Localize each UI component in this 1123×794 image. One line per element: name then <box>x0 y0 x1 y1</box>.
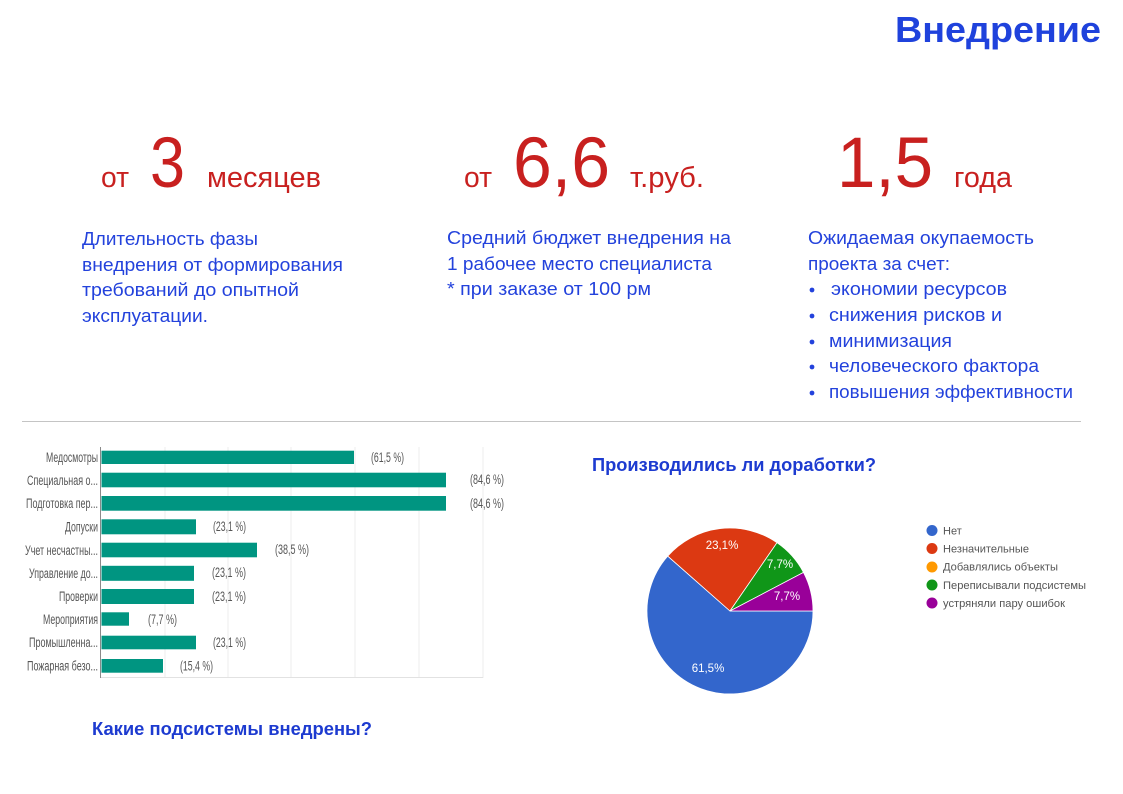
title: Внедрение <box>895 9 1101 50</box>
category labels: Медосмотры <box>46 450 98 465</box>
category labels: Допуски <box>65 520 98 534</box>
value labels: (38,5 %) <box>275 542 309 557</box>
category labels: Специальная о... <box>27 473 98 488</box>
value labels: (7,7 %) <box>148 612 177 627</box>
panel: payback <box>808 124 1073 402</box>
text: payback description: минимизация <box>829 330 952 351</box>
slice labels: 23,1% <box>706 540 738 552</box>
stat: from 3 months: 3 <box>150 124 185 203</box>
text: budget description: * при заказе от 100 рм <box>447 278 651 299</box>
pie chart: were modifications made <box>647 528 813 694</box>
category labels: Промышленна... <box>29 635 98 650</box>
heading: bar chart caption: Какие подсистемы внедрены? <box>92 719 372 739</box>
value labels: (84,6 %) <box>470 472 504 487</box>
text: payback description: Ожидаемая окупаемость <box>808 227 1034 248</box>
category labels <box>25 450 98 674</box>
category labels: Управление до... <box>29 566 98 581</box>
value labels: (23,1 %) <box>213 519 246 534</box>
stat: from 3 months: месяцев <box>207 162 321 194</box>
bar chart: implemented subsystems <box>25 447 504 678</box>
pie legend: Переписывали подсистемы <box>943 580 1086 592</box>
value labels: (15,4 %) <box>180 658 213 674</box>
slice: no 61.5% <box>647 556 813 694</box>
category labels: Пожарная безо... <box>27 658 98 674</box>
panel: budget <box>447 124 732 299</box>
stat: from 6.6 thousand rubles <box>464 124 704 203</box>
text: payback description: повышения эффективности <box>829 381 1073 402</box>
text: payback description: проекта за счет: <box>808 253 950 274</box>
panel: duration <box>82 124 343 326</box>
text: duration description <box>82 228 343 326</box>
pie legend: устряняли пару ошибок <box>943 598 1065 610</box>
text: payback description: человеческого фактора <box>829 355 1040 376</box>
pie legend <box>926 525 1086 610</box>
text: payback description <box>808 227 1073 402</box>
stat: from 6.6 thousand rubles: т.руб. <box>630 162 704 194</box>
value labels: (23,1 %) <box>212 565 246 580</box>
text: budget description: 1 рабочее место специалиста <box>447 253 713 274</box>
pie legend: Нет <box>943 526 962 538</box>
stat: 1.5 years: года <box>954 162 1013 194</box>
text: duration description: эксплуатации. <box>82 305 208 326</box>
stat: 1.5 years <box>837 124 1013 203</box>
slice: minor 23.1% <box>668 528 777 611</box>
value labels: (23,1 %) <box>212 589 246 604</box>
stat: from 3 months <box>101 124 321 203</box>
slice: fixed bugs 7.7% <box>730 572 813 611</box>
stat: 1.5 years: 1,5 <box>837 124 933 203</box>
value labels: (61,5 %) <box>371 450 404 465</box>
stat: from 3 months: от <box>101 162 129 194</box>
value labels: (84,6 %) <box>470 496 504 511</box>
text: payback description: экономии ресурсов <box>831 278 1007 299</box>
pie legend: Незначительные <box>943 544 1029 556</box>
pie legend: Добавлялись объекты <box>943 562 1058 574</box>
text: budget description <box>447 227 732 299</box>
heading: pie chart caption: Производились ли доработки? <box>592 455 876 475</box>
stat: from 6.6 thousand rubles: 6,6 <box>513 124 610 203</box>
category labels: Учет несчастны... <box>25 543 98 558</box>
slice: rewrote subsystems 7.7% <box>730 543 804 611</box>
category labels: Подготовка пер... <box>26 496 98 511</box>
slice labels <box>692 540 800 675</box>
text: payback description: снижения рисков и <box>829 304 1002 325</box>
category labels: Проверки <box>59 589 98 604</box>
value labels <box>148 450 504 674</box>
category labels: Мероприятия <box>43 612 98 627</box>
value labels: (23,1 %) <box>213 635 246 650</box>
slice labels: 61,5% <box>692 663 724 675</box>
slice labels: 7,7% <box>767 559 793 571</box>
text: duration description: требований до опытной <box>82 279 299 300</box>
text: duration description: Длительность фазы <box>82 228 258 249</box>
text: budget description: Средний бюджет внедрения на <box>447 227 732 248</box>
slice labels: 7,7% <box>774 591 800 603</box>
bars <box>102 451 446 673</box>
text: duration description: внедрения от формирования <box>82 254 343 275</box>
stat: from 6.6 thousand rubles: от <box>464 162 492 194</box>
